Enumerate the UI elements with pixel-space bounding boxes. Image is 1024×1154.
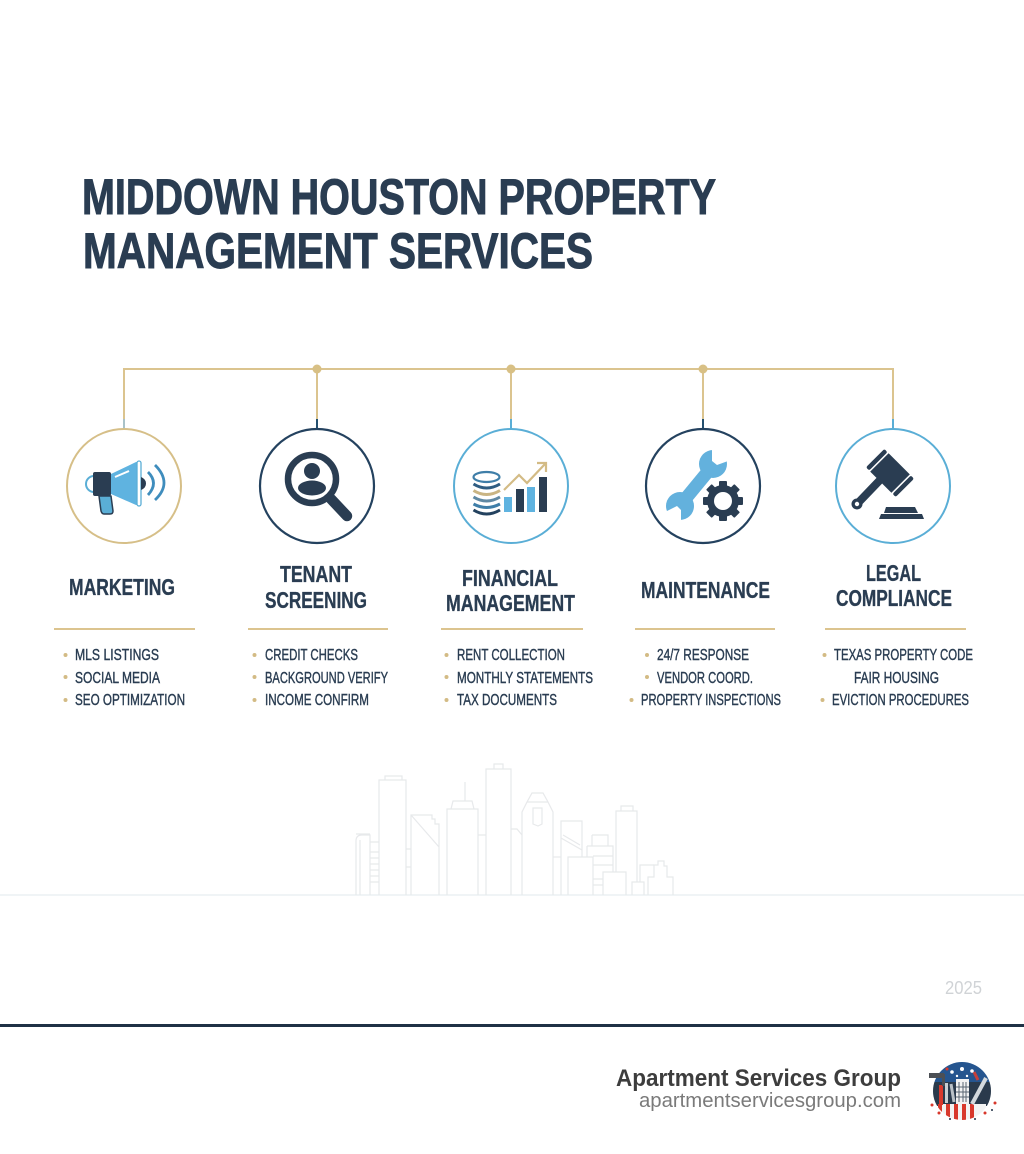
list: legal compliance: TEXAS PROPERTY CODE [834, 647, 973, 664]
list: maintenance: VENDOR COORD. [657, 670, 753, 687]
panel: financial management [441, 429, 593, 709]
icon: apartment services logo [929, 1062, 996, 1120]
list: maintenance: 24/7 RESPONSE [657, 647, 749, 664]
icon: gavel [836, 429, 950, 543]
list: maintenance [630, 647, 781, 709]
heading: tenant screening: SCREENING [265, 587, 367, 613]
list: financial management: MONTHLY STATEMENTS [457, 670, 593, 687]
title [82, 169, 716, 279]
list: legal compliance [820, 647, 973, 709]
footer brand text: Apartment Services Group [616, 1065, 901, 1092]
heading: legal compliance [836, 560, 952, 611]
icon: coins and growth chart [454, 429, 568, 543]
heading: maintenance: MAINTENANCE [641, 577, 770, 603]
list: tenant screening: CREDIT CHECKS [265, 647, 358, 664]
list: maintenance: PROPERTY INSPECTIONS [641, 692, 781, 709]
list: marketing: SEO OPTIMIZATION [75, 692, 185, 709]
heading: legal compliance: LEGAL [866, 560, 921, 586]
list: marketing: SOCIAL MEDIA [75, 670, 161, 687]
icon: wrench and gear [646, 429, 760, 543]
heading: financial management [446, 565, 575, 616]
list: financial management: RENT COLLECTION [457, 647, 565, 664]
list: legal compliance: EVICTION PROCEDURES [832, 692, 969, 709]
title: MIDDOWN HOUSTON PROPERTY [82, 169, 716, 225]
list: financial management: TAX DOCUMENTS [457, 692, 557, 709]
panel: maintenance [630, 429, 781, 709]
title: MANAGEMENT SERVICES [83, 223, 593, 279]
list: tenant screening: INCOME CONFIRM [265, 692, 369, 709]
panel: marketing [54, 429, 195, 709]
list: legal compliance: FAIR HOUSING [854, 670, 939, 687]
list: tenant screening [252, 647, 388, 709]
heading: marketing: MARKETING [69, 574, 175, 600]
heading: tenant screening [265, 561, 367, 613]
heading: tenant screening: TENANT [280, 561, 352, 587]
list: tenant screening: BACKGROUND VERIFY [265, 670, 388, 687]
list: marketing [64, 647, 185, 709]
list: marketing: MLS LISTINGS [75, 647, 159, 664]
panel: tenant screening [248, 429, 388, 709]
icon: magnifier with person [260, 429, 374, 543]
footer brand text: apartmentservicesgroup.com [639, 1090, 901, 1112]
list: financial management [444, 647, 593, 709]
footer divider [0, 1024, 1024, 1027]
year label: 2025 [945, 978, 982, 998]
panel: legal compliance [820, 429, 973, 709]
heading: financial management: FINANCIAL [462, 565, 558, 591]
icon: megaphone [67, 429, 181, 543]
heading: legal compliance: COMPLIANCE [836, 585, 952, 611]
heading: financial management: MANAGEMENT [446, 590, 575, 616]
skyline illustration [0, 764, 1024, 895]
footer brand text [616, 1065, 901, 1112]
connector lines [124, 364, 893, 429]
